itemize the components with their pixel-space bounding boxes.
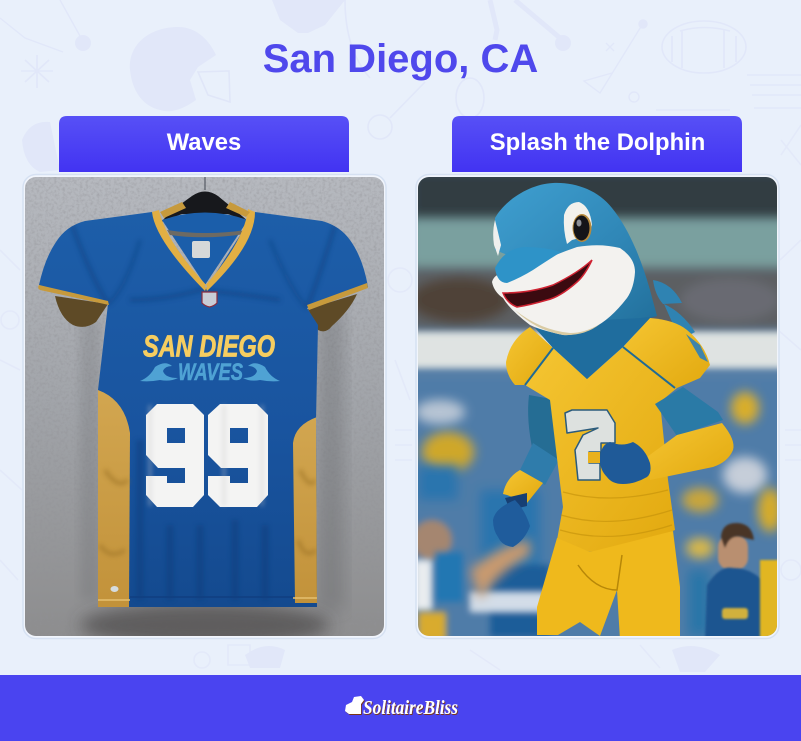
dolphin snout (495, 247, 561, 283)
icon: hanger (161, 177, 249, 222)
left glove (493, 493, 530, 547)
sleeve gold trim (38, 285, 109, 305)
icon: faint star (21, 55, 53, 88)
jersey number 2 (565, 410, 615, 480)
dorsal fins (653, 280, 695, 334)
right upper arm (655, 387, 723, 436)
gold side panels (98, 390, 130, 607)
panel: dolphin mascot photo (410, 170, 790, 650)
icon: faint whistle and stripes (0, 0, 571, 139)
title: San Diego, CA (263, 37, 538, 81)
jersey folds (560, 490, 672, 536)
icon: faint helmet (130, 27, 230, 111)
icon: wave ornaments (140, 363, 280, 381)
wordmark: San Diego: SAN DIEGO (143, 328, 275, 364)
wordmark: Waves: WAVES (178, 359, 243, 386)
right yellow sleeve (647, 423, 734, 480)
panel: jersey photo (23, 174, 386, 647)
icon: faint lines grid (656, 75, 801, 110)
footer logo: Solitaire Bliss (345, 696, 458, 719)
dolphin mouth (503, 260, 592, 307)
jersey torso (525, 347, 677, 552)
icon: faint play diagram (584, 20, 647, 102)
league shield (202, 292, 217, 307)
concrete wall (25, 177, 384, 647)
sleeve undersides (55, 294, 357, 331)
right glove (600, 442, 651, 484)
left forearm (520, 443, 559, 485)
icon: logo cards (345, 696, 364, 714)
blurred spectator (705, 523, 780, 640)
tab label: Splash the Dolphin: Splash the Dolphin (490, 129, 705, 156)
collar tag (192, 241, 210, 258)
panel: Splash the Dolphin header tab (452, 116, 742, 172)
icon: faint helmet left (22, 122, 60, 172)
icon: faint side doodles (0, 125, 801, 670)
panel: Waves header tab (59, 116, 349, 172)
shoulder pads (506, 327, 553, 385)
collar inner (162, 212, 248, 285)
fabric shading (72, 225, 335, 600)
dolphin eye (564, 202, 592, 244)
dolphin head (495, 183, 657, 320)
jersey body (39, 212, 368, 607)
icon: faint football (662, 21, 746, 73)
icon: faint trophy (272, 0, 345, 33)
blurred stadium background (410, 170, 790, 650)
jersey number 99 (146, 404, 268, 507)
pants (537, 531, 680, 640)
dolphin far eye (493, 220, 501, 256)
left upper arm (528, 395, 557, 460)
hem snap (110, 586, 118, 592)
left yellow cuff (503, 470, 543, 503)
jersey (38, 202, 368, 607)
logo wordmark: SolitaireBliss (363, 697, 458, 719)
collar trim (152, 209, 255, 291)
neck and collar (535, 315, 657, 379)
dolphin white face (492, 245, 635, 335)
tab label: Waves: Waves (167, 129, 241, 156)
footer bar (0, 675, 801, 741)
mascot (492, 183, 734, 640)
